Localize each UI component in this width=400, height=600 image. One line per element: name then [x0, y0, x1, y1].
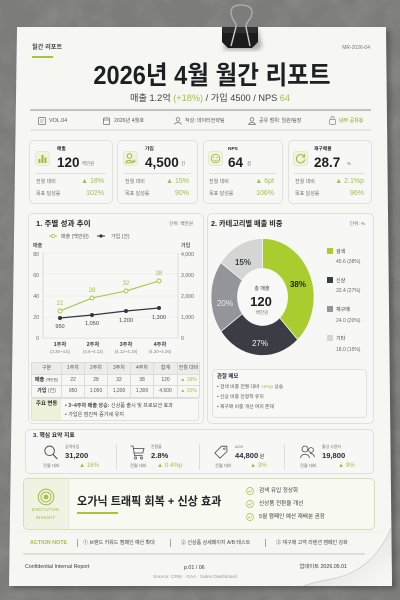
memo box — [212, 369, 367, 418]
insight label: EXECUTIVE — [32, 508, 59, 513]
callout: key changes — [31, 398, 199, 421]
target value: 96% — [350, 190, 364, 197]
icon: target — [38, 488, 54, 506]
volume text: VOL.04 — [49, 118, 67, 124]
line chart: 1,300 — [152, 315, 166, 321]
legend: 신상 — [336, 277, 346, 284]
line chart: 가입 (건) — [111, 233, 130, 240]
value: 120 — [57, 155, 80, 170]
footer: page number: p.01 / 06 — [184, 565, 205, 571]
line chart: 22 — [57, 301, 64, 307]
unit note: 단위: 백만원 — [169, 221, 193, 226]
data table: 2주차 — [90, 365, 102, 371]
title: 2026년 4월 월간 리포트 — [93, 62, 331, 90]
issue text: 2026년 4월호 — [114, 118, 144, 124]
footer: update date: 업데이트 2026.05.01 — [300, 564, 347, 570]
target value: 90% — [175, 190, 189, 197]
data table: 120 — [161, 377, 170, 383]
line chart: (4.13~4.19) — [115, 349, 138, 354]
data table: 22 — [70, 377, 76, 383]
icon: add user — [123, 151, 138, 166]
binder clip — [222, 4, 264, 52]
memo line 2: • 신상 비중 안정적 유지 — [217, 395, 264, 400]
comparison value: ▲ 9% — [338, 462, 355, 469]
metric label: 활성 사용자 — [322, 444, 341, 449]
donut chart: 120 — [250, 294, 272, 309]
data table: 950 — [69, 388, 77, 394]
legend: 18.0 (15%) — [336, 347, 361, 353]
data table: 38 — [139, 377, 145, 383]
icon: search — [44, 446, 58, 460]
icon: refresh — [293, 151, 308, 166]
line chart: 1주차 — [54, 340, 66, 348]
panel: category share — [207, 213, 374, 424]
data table: 28 — [93, 377, 99, 383]
legend: 32.4 (27%) — [336, 288, 361, 294]
target: 목표 달성률 — [209, 191, 233, 197]
metric value: 2.8% — [151, 450, 168, 460]
data table: 32 — [116, 377, 122, 383]
month over month: 전월 대비 — [36, 179, 56, 185]
data table: 4주차 — [136, 365, 148, 371]
target: 목표 달성률 — [36, 191, 60, 197]
data table: 3주차 — [113, 365, 125, 371]
action 1: ① 브랜드 키워드 캠페인 예산 확대 — [83, 540, 155, 546]
line chart: 매출 (백만원) — [61, 233, 89, 240]
icon: volume — [38, 117, 46, 125]
data table: 매출 (백만원) — [35, 377, 58, 383]
unit: 건 — [181, 161, 185, 166]
month over month: 전월 대비 — [209, 179, 229, 185]
data table: ▲ 15% — [180, 388, 197, 394]
line chart: (4.6~4.12) — [83, 349, 104, 354]
action note label: ACTION NOTE — [30, 540, 67, 546]
line chart: 20 — [33, 315, 39, 321]
KPI card: signups — [117, 140, 198, 204]
target: 목표 달성률 — [125, 191, 149, 197]
data table: 1,200 — [113, 388, 125, 394]
unit: % — [347, 161, 351, 166]
footer: confidentiality: Confidential Internal Report — [25, 564, 89, 570]
month over month value: ▲ 18% — [81, 178, 104, 185]
line chart: 2,000 — [181, 294, 194, 300]
unit note: 단위: % — [350, 221, 365, 226]
icon: active users — [300, 446, 315, 458]
data table: 가입 (건) — [37, 388, 56, 394]
check item 2 — [246, 500, 303, 508]
donut chart: 백만원 — [256, 309, 268, 316]
data table: 합계 — [161, 365, 170, 371]
footer: source: Source: CRM · GA4 · Sales Dashboard — [153, 575, 237, 580]
data table: 전월 대비 — [179, 365, 198, 371]
month over month value: ▲ 6pt — [255, 178, 274, 185]
line chart: (3.30~4.5) — [50, 349, 71, 354]
memo line 1: • 검색 비중 전월 대비 +6%p 상승 — [217, 385, 283, 390]
panel: weekly trend — [28, 213, 204, 424]
line chart: 1,000 — [181, 315, 194, 321]
metric label: AOV — [235, 444, 243, 449]
donut chart: 20% — [217, 299, 233, 308]
target value: 106% — [256, 190, 274, 197]
data table: 1주차 — [67, 365, 79, 371]
line chart: 매출 — [33, 242, 43, 249]
data table: 1,050 — [90, 388, 102, 394]
icon: cart — [130, 446, 144, 460]
check item 1 — [246, 487, 298, 495]
month over month value: ▲ 2.1%p — [335, 178, 364, 185]
callout label: 주요 변동 — [36, 401, 57, 407]
check item 1: 검색 유입 정상화 — [259, 488, 298, 494]
heading: key metrics: 3. 핵심 요약 지표 — [33, 433, 75, 439]
insight label line 2: INSIGHT — [36, 516, 55, 520]
line chart: 3,000 — [181, 273, 194, 279]
KPI card: NPS — [203, 140, 283, 204]
KPI card: repurchase — [288, 140, 372, 204]
legend: 기타 — [336, 335, 346, 342]
data table: 구분 — [42, 365, 51, 371]
value: 4,500 — [145, 155, 179, 170]
metric value: 31,200 — [65, 450, 88, 460]
legend: 재구매 — [336, 306, 350, 313]
metric value: 44,800 원 — [235, 450, 264, 460]
data table — [31, 362, 200, 398]
icon: author — [174, 117, 182, 125]
comparison value: ▲ 0.4%p — [157, 462, 182, 469]
metric value: 19,800 — [322, 450, 345, 460]
line chart: 40 — [33, 294, 39, 300]
line chart: 80 — [33, 252, 39, 258]
panel: key metrics — [25, 429, 374, 474]
comparison: 전월 대비 — [130, 463, 147, 468]
icon: lock — [329, 116, 336, 125]
meta row — [38, 116, 364, 125]
donut chart: 27% — [252, 339, 268, 348]
comparison: 전월 대비 — [215, 463, 232, 468]
KPI card: revenue — [29, 140, 113, 204]
author text: 작성: 데이터전략팀 — [185, 118, 225, 124]
target value: 102% — [86, 190, 104, 197]
label: 매출 — [57, 147, 66, 152]
audience text: 공유 범위: 임원/팀장 — [259, 118, 301, 124]
donut chart: 15% — [235, 258, 251, 267]
check item 3 — [246, 513, 325, 521]
check list — [246, 487, 325, 521]
icon: bar chart — [35, 151, 50, 166]
icon: tag — [214, 446, 228, 459]
data table: ▲ 18% — [180, 377, 197, 383]
line chart: 950 — [55, 324, 65, 330]
target: 목표 달성률 — [295, 191, 319, 197]
header tag: 월간 리포트 — [32, 44, 62, 51]
callout line 2: • 가입은 점진적 증가세 유지 — [65, 412, 124, 418]
unit: 점 — [247, 161, 251, 166]
line chart: 2주차 — [87, 340, 99, 348]
value: 64 — [228, 155, 243, 170]
heading: weekly trend: 1. 주별 성과 추이 — [36, 219, 91, 228]
memo heading: 관찰 메모 — [217, 374, 238, 380]
label: NPS — [228, 147, 238, 152]
line chart: 32 — [123, 281, 130, 287]
month over month: 전월 대비 — [125, 179, 145, 185]
subtitle: 매출 1.2억 (+18%) / 가입 4500 / NPS 64 — [130, 93, 290, 103]
heading: category share: 2. 카테고리별 매출 비중 — [211, 219, 282, 228]
line chart: 38 — [156, 271, 163, 277]
line chart: (4.20~4.26) — [149, 349, 172, 354]
memo line 3: • 재구매 비중 개선 여지 존재 — [217, 405, 274, 410]
value: 28.7 — [314, 155, 340, 170]
data table: 1,300 — [136, 388, 148, 394]
legend: 24.0 (20%) — [336, 318, 361, 324]
legend: 45.6 (38%) — [336, 259, 361, 265]
comparison value: ▲ 3% — [250, 462, 267, 469]
data table: 4,500 — [159, 388, 172, 394]
check item 2: 신상품 전환율 개선 — [259, 501, 303, 507]
line chart: 1,050 — [85, 321, 99, 327]
line chart: 1,200 — [119, 318, 133, 324]
action 2: ② 신상품 상세페이지 A/B 테스트 — [181, 540, 250, 546]
donut chart: 38% — [290, 280, 306, 289]
line chart: 0 — [181, 336, 184, 342]
metric label: 검색유입 — [65, 444, 79, 449]
comparison: 전월 대비 — [300, 463, 317, 468]
legend: 검색 — [336, 248, 346, 255]
line chart: 가입 — [181, 242, 191, 249]
month over month: 전월 대비 — [295, 179, 315, 185]
document id: MR-2026-04 — [342, 45, 370, 51]
comparison value: ▲ 16% — [79, 462, 99, 469]
line chart: 28 — [89, 288, 96, 294]
line chart: 3주차 — [120, 340, 132, 348]
line chart: 60 — [33, 273, 39, 279]
icon: audience — [248, 117, 256, 125]
label: 가입 — [145, 147, 154, 152]
metric label: 전환율 — [151, 444, 162, 449]
icon: smile — [208, 151, 223, 166]
comparison: 전월 대비 — [43, 463, 60, 468]
line chart: 0 — [36, 336, 39, 342]
headline underline — [77, 512, 118, 514]
action 3: ③ 재구매 고객 리텐션 캠페인 강화 — [276, 540, 348, 546]
insight headline: 오가닉 트래픽 회복 + 신상 효과 — [77, 496, 221, 508]
line chart: 4,000 — [181, 252, 194, 258]
icon: calendar — [103, 118, 110, 125]
classification text: 내부 공유용 — [339, 118, 363, 124]
check item 3: 5월 캠페인 예산 재배분 권장 — [259, 514, 325, 520]
month over month value: ▲ 15% — [166, 178, 189, 185]
callout line 1: • 3~4주차 매출 상승: 신상품 출시 및 프로모션 효과 — [65, 403, 173, 409]
line chart: 4주차 — [154, 340, 166, 348]
unit: 백만원 — [82, 161, 94, 166]
panel: executive insight — [23, 478, 375, 530]
label: 재구매율 — [314, 147, 332, 152]
donut chart: 총 매출 — [254, 285, 270, 292]
